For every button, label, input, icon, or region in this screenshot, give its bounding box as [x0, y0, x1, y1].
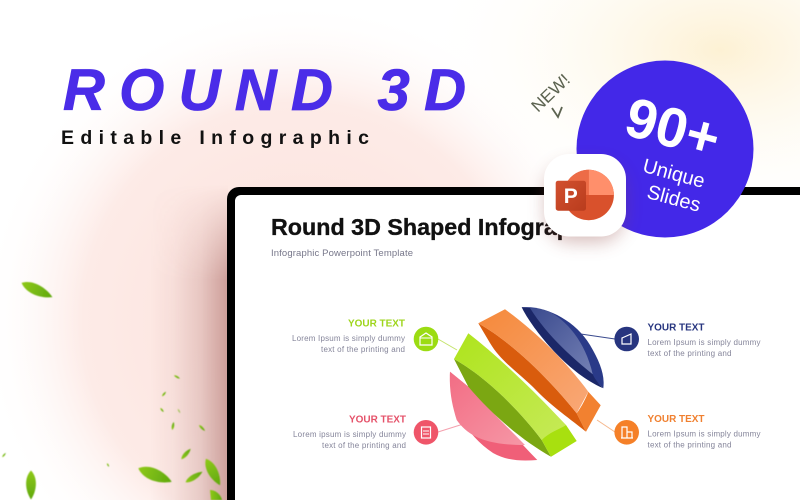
item: navy [614, 322, 760, 358]
item: orange: text of the printing and [648, 440, 732, 450]
icon: green bank [414, 327, 438, 351]
new label: NEW! [528, 70, 574, 116]
item: green: YOUR TEXT [348, 318, 406, 330]
item: green [292, 318, 438, 354]
item: navy: text of the printing and [648, 349, 732, 358]
item: navy: Lorem Ipsum is simply dummy [648, 338, 760, 347]
3D sphere chart [450, 307, 604, 460]
laptop screen frame [227, 187, 800, 500]
laptop screen [235, 195, 800, 500]
icon: orange office [614, 420, 639, 445]
icon: red document [414, 420, 438, 445]
item: green: Lorem Ipsum is simply dummy [292, 334, 405, 343]
slice: navy [522, 307, 604, 388]
icon: PowerPoint app: P [564, 185, 578, 208]
slice: pink [450, 372, 537, 460]
item: orange: Lorem Ipsum is simply dummy [648, 430, 760, 438]
item: orange [614, 413, 760, 450]
slide heading: Round 3D Shaped Infograp [271, 214, 571, 240]
decorative leaves [2, 278, 224, 500]
item: red: YOUR TEXT [349, 414, 407, 426]
item: navy: YOUR TEXT [648, 322, 705, 334]
slide subheading: Infographic Powerpoint Template [271, 248, 413, 259]
main title: ROUND 3D [63, 58, 466, 123]
icon: PowerPoint app [544, 154, 626, 242]
badge: 90+ unique slides: 90+ [619, 85, 727, 170]
item: red: text of the printing and [322, 441, 406, 450]
item: orange: YOUR TEXT [648, 413, 705, 425]
slice: green [454, 333, 577, 457]
subtitle: Editable Infographic [61, 127, 369, 149]
connector lines [438, 332, 615, 432]
badge: 90+ unique slides [576, 60, 754, 238]
item: red: Lorem ipsum is simply dummy [293, 430, 406, 439]
item: red [293, 414, 438, 450]
badge: 90+ unique slides: Slides [645, 181, 703, 217]
slice: orange [478, 309, 601, 432]
item: green: text of the printing and [321, 345, 405, 354]
badge: 90+ unique slides: Unique [640, 155, 707, 193]
icon: navy building [614, 327, 639, 351]
